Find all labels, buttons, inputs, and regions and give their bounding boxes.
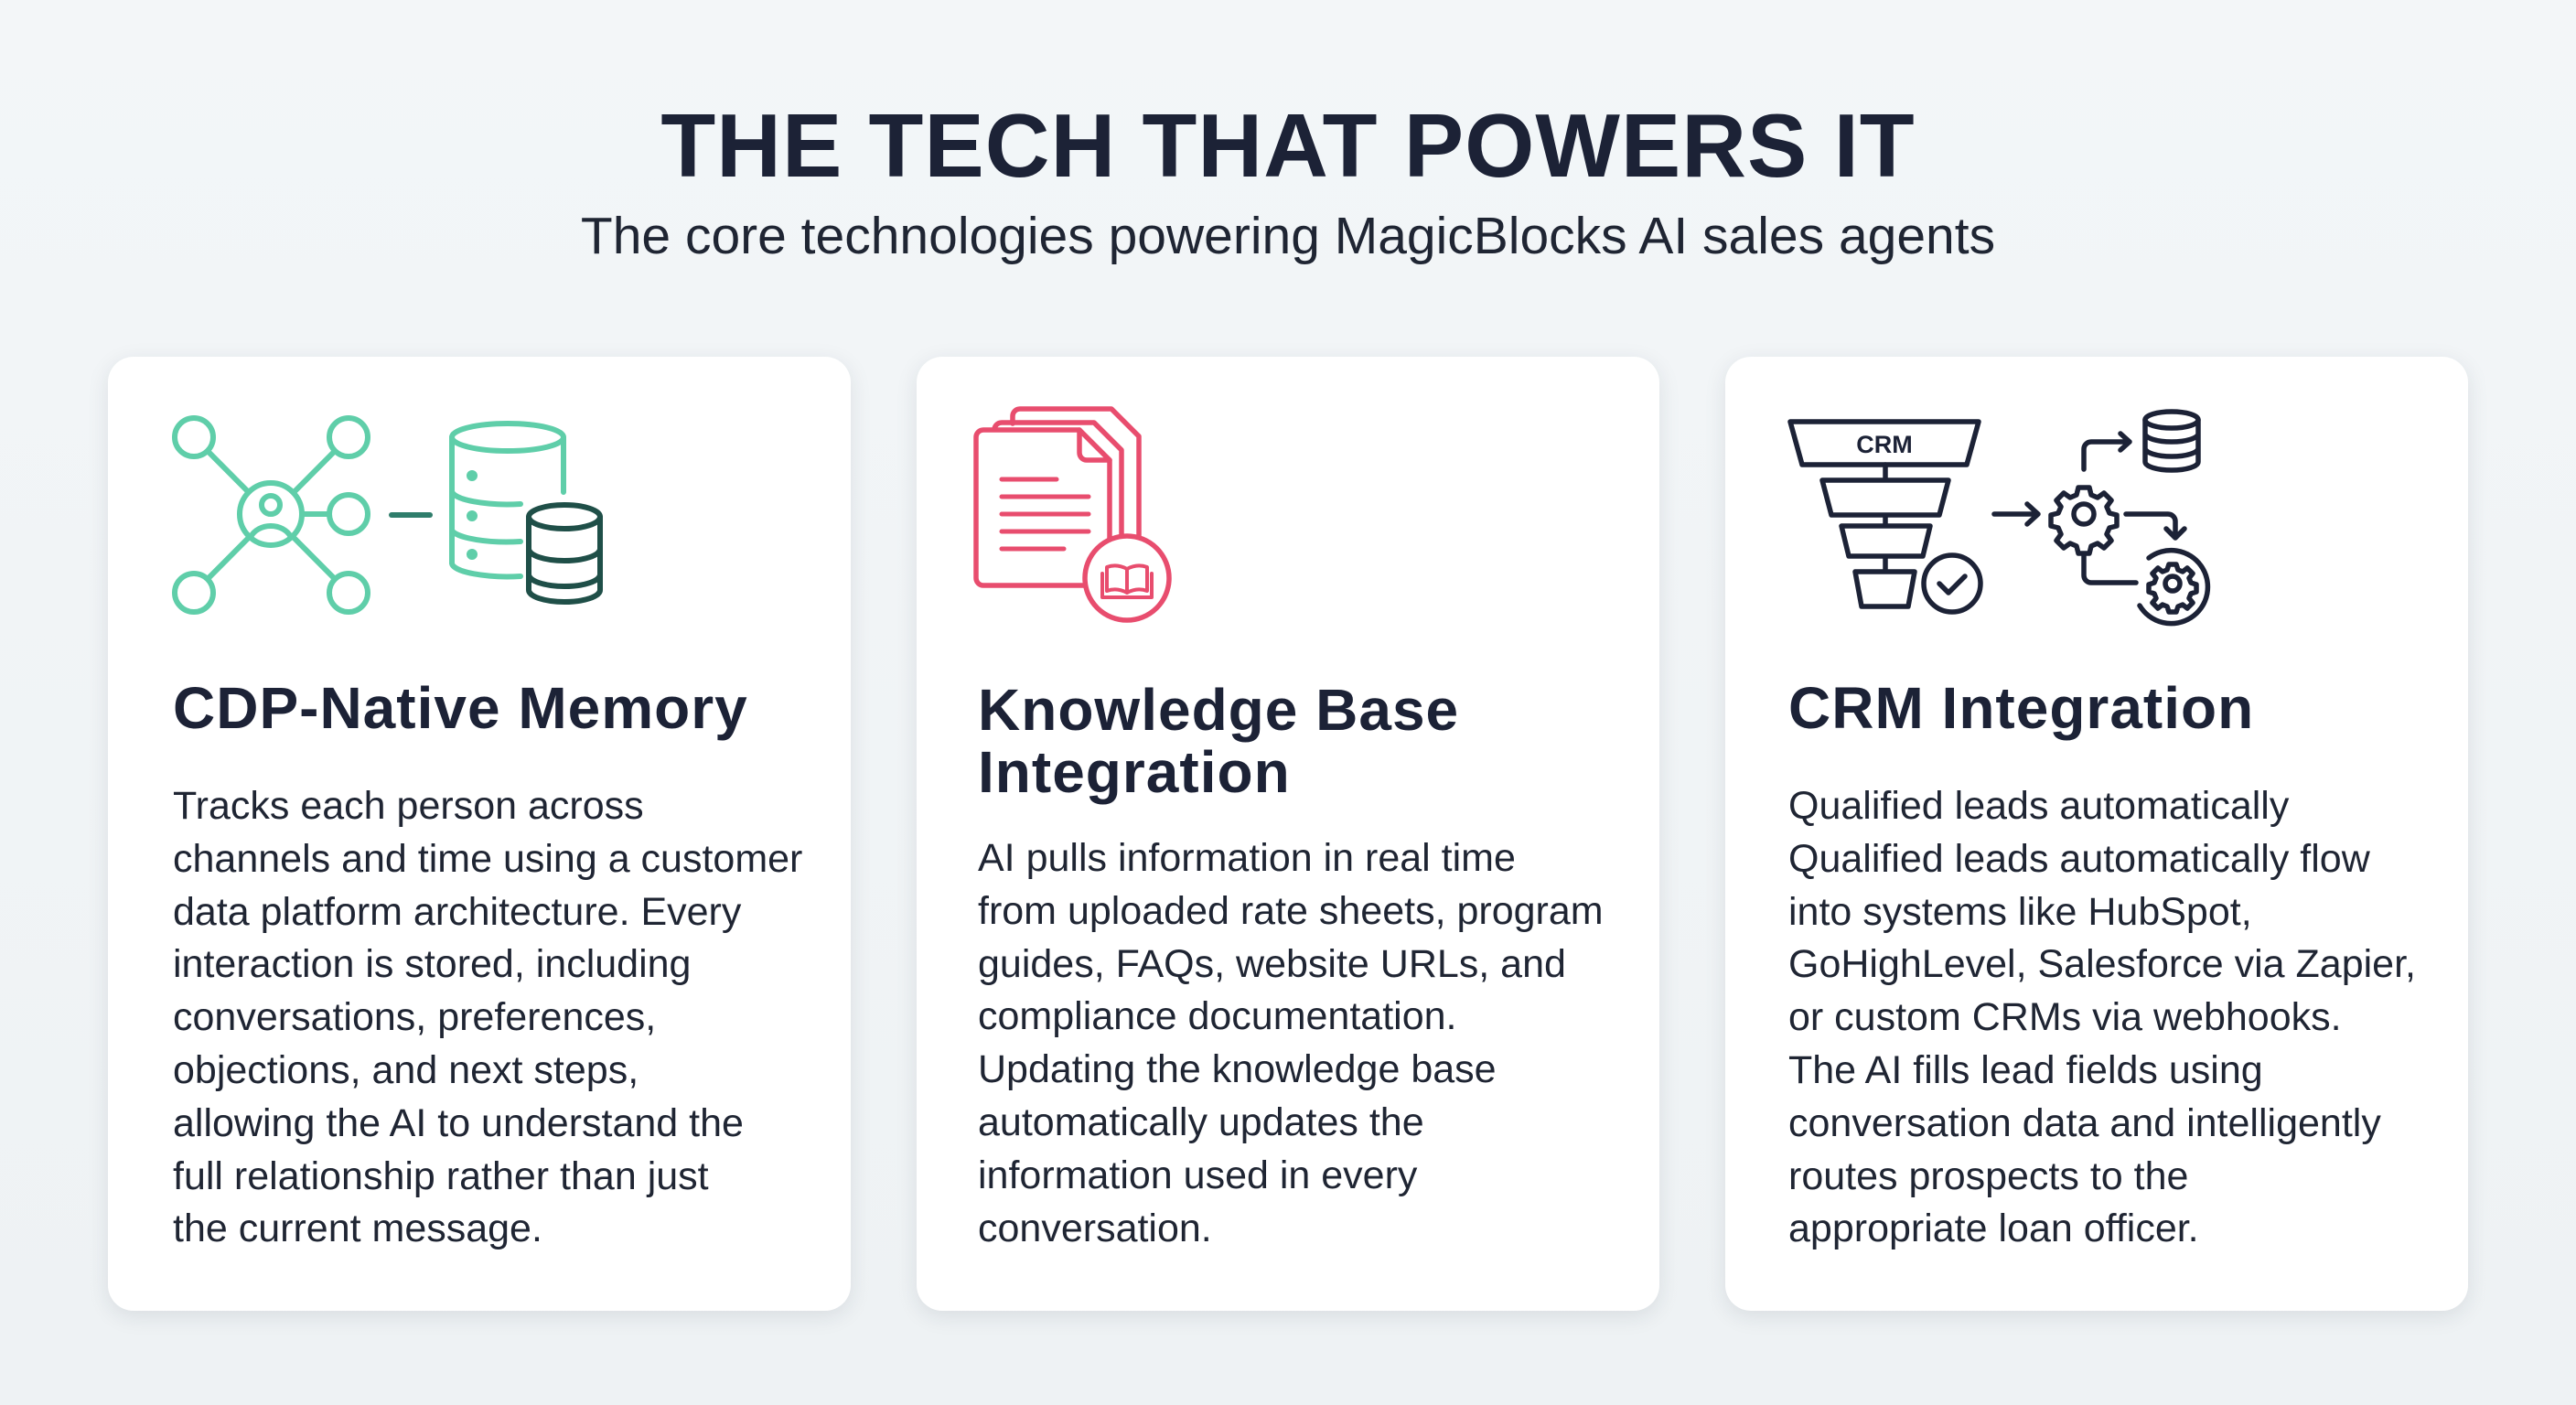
text: CRM body: routes prospects to the: [1788, 1154, 2188, 1198]
text: knowledge body: compliance documentation.: [978, 994, 1456, 1038]
text: knowledge body: automatically updates the: [978, 1100, 1424, 1144]
subtitle: The core technologies powering MagicBlocks AI sales agents: [581, 207, 1995, 265]
panel: CDP-Native Memory: [108, 357, 851, 1311]
heading: Knowledge Base Integration: Knowledge Base: [978, 677, 1459, 743]
text: CRM body: conversation data and intelligently: [1788, 1101, 2381, 1145]
text: CDP body: the current message.: [173, 1207, 542, 1250]
text: knowledge body: Updating the knowledge base: [978, 1047, 1497, 1091]
panel: Knowledge Base Integration: [917, 357, 1659, 1311]
text: CRM body: appropriate loan officer.: [1788, 1207, 2199, 1250]
text: CDP body: channels and time using a customer: [173, 837, 802, 881]
heading: CRM Integration: CRM Integration: [1788, 675, 2254, 741]
text: knowledge body: from uploaded rate sheets, program: [978, 889, 1604, 933]
text: CDP body: [173, 784, 802, 1250]
title: THE TECH THAT POWERS IT: [660, 95, 1916, 196]
icon: CRM funnel and automation: CRM: [1856, 431, 1913, 458]
text: knowledge body: [978, 836, 1604, 1250]
text: CRM body: into systems like HubSpot,: [1788, 890, 2252, 934]
text: CRM body: GoHighLevel, Salesforce via Zapier,: [1788, 942, 2416, 986]
text: CRM body: Qualified leads automatically flow: [1788, 837, 2370, 881]
text: knowledge body: AI pulls information in real time: [978, 836, 1516, 880]
text: CDP body: conversations, preferences,: [173, 995, 656, 1039]
heading: Knowledge Base Integration: [978, 677, 1459, 805]
text: CRM body: [1788, 784, 2416, 1250]
text: CRM body: Qualified leads automatically: [1788, 784, 2289, 828]
text: CDP body: interaction is stored, including: [173, 942, 691, 986]
text: knowledge body: guides, FAQs, website URLs, and: [978, 942, 1566, 986]
heading: Knowledge Base Integration: Integration: [978, 739, 1291, 805]
text: CDP body: full relationship rather than just: [173, 1154, 709, 1198]
text: CRM body: or custom CRMs via webhooks.: [1788, 995, 2342, 1039]
text: CDP body: objections, and next steps,: [173, 1048, 639, 1092]
text: knowledge body: conversation.: [978, 1207, 1212, 1250]
panel: CRM Integration: [1725, 357, 2468, 1311]
text: knowledge body: information used in every: [978, 1153, 1417, 1197]
text: CRM body: The AI fills lead fields using: [1788, 1048, 2263, 1092]
text: CDP body: allowing the AI to understand the: [173, 1101, 744, 1145]
text: CDP body: data platform architecture. Every: [173, 890, 741, 934]
text: CDP body: Tracks each person across: [173, 784, 644, 828]
heading: CDP-Native Memory: CDP-Native Memory: [173, 675, 748, 741]
